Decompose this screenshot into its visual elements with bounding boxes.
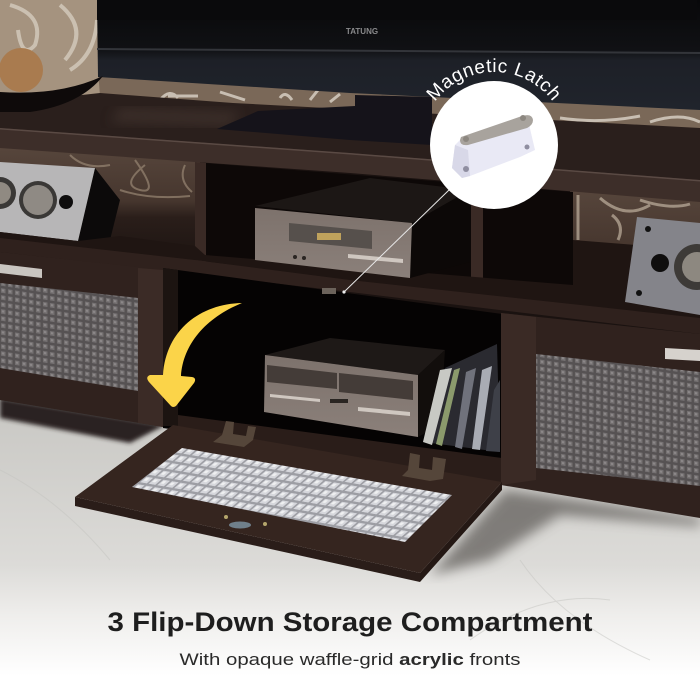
lower wallpaper behind left and right bays <box>0 146 700 308</box>
tv stand <box>217 95 432 145</box>
callout: magnetic latch: Magnetic Latch <box>426 58 559 101</box>
right drawer acrylic panel <box>536 354 700 486</box>
upper compartments <box>195 162 573 296</box>
marble floor <box>0 400 700 700</box>
right drawer <box>501 313 700 518</box>
dark backdrop of unit <box>0 0 700 420</box>
yellow fold-down arrow <box>147 303 242 407</box>
lower audio player <box>264 338 445 437</box>
left speaker <box>0 162 120 241</box>
door hinge right <box>402 453 446 481</box>
compartment dividers <box>195 162 206 262</box>
title: 3 Flip-Down Storage Compartment <box>108 607 593 637</box>
left drawer handle <box>0 264 42 278</box>
furniture shadow on floor <box>0 398 700 575</box>
door latch plate <box>224 515 267 528</box>
curved label <box>421 72 567 145</box>
callout leader line <box>322 190 449 294</box>
stack of CD cases <box>423 344 500 452</box>
subtitle: With opaque waffle-grid acrylic fronts <box>180 650 521 669</box>
flip-down door <box>75 421 502 582</box>
lower open compartment <box>163 268 502 484</box>
television <box>97 0 700 110</box>
magnetic latch icon <box>452 115 535 178</box>
bowl of decor <box>0 48 103 112</box>
right drawer handle <box>665 348 700 361</box>
door waffle acrylic panel <box>132 448 452 542</box>
left drawer <box>0 252 163 427</box>
television: TATUNG <box>346 27 378 36</box>
upper audio player <box>255 178 470 278</box>
middle shelf <box>0 232 700 334</box>
top shelf of TV unit <box>0 93 700 202</box>
door hinge left <box>213 421 256 447</box>
callout: magnetic latch <box>426 58 559 209</box>
callout circle <box>430 81 558 209</box>
patterned wallpaper wall <box>0 0 700 132</box>
left drawer acrylic panel <box>0 283 138 391</box>
right speaker <box>625 217 700 315</box>
